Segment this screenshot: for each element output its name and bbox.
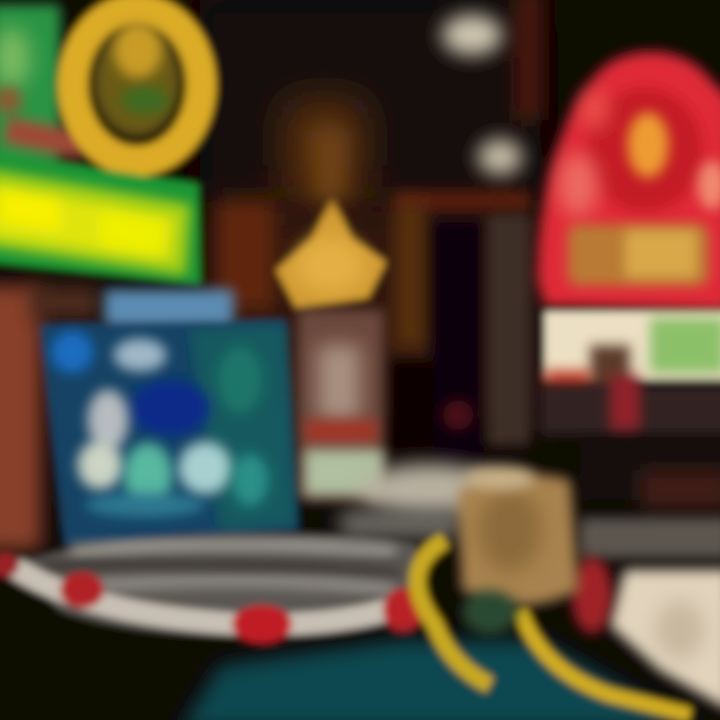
red sign (538, 52, 720, 310)
doorway and pillars (215, 192, 530, 460)
right lower counter (540, 375, 720, 558)
slot machine (298, 310, 383, 500)
teal floor (180, 640, 700, 720)
bright table surface behind cup (340, 464, 500, 538)
tan cup (458, 466, 578, 605)
yellow curved stand (417, 540, 690, 715)
table edge with red markers (0, 533, 425, 643)
blue laptop screen (40, 290, 298, 545)
cream surface lower right (610, 570, 720, 710)
gold ring sign (73, 9, 201, 161)
left wood wall (0, 285, 100, 550)
green sign top left (0, 5, 87, 165)
green and yellow banner (0, 152, 200, 284)
gold star (276, 130, 386, 308)
ceiling lights (442, 15, 522, 175)
white and green panel (545, 312, 720, 390)
red post by cup (572, 557, 612, 633)
